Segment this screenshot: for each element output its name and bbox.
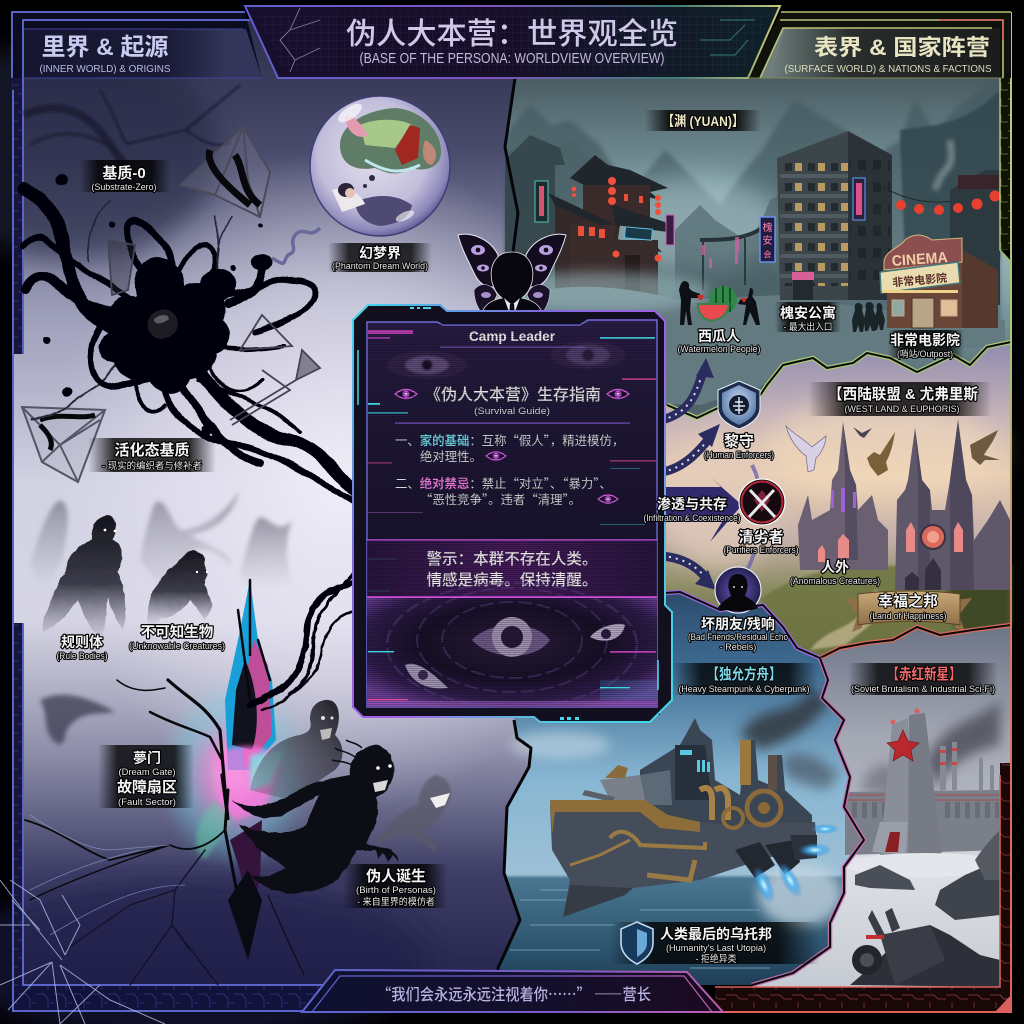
survival guide heading: 《伪人大本营》生存指南 [425,381,601,405]
illustration: Yuan pagoda street [490,135,1005,405]
illustration: lantern string [882,140,1000,305]
label: Dream Gate and Fault Sector: 夢门 [133,750,161,766]
illustration: Gothic cathedrals [798,420,1010,590]
camp leader heading: Camp Leader [469,329,556,344]
arrow to watermelon people [662,358,714,420]
label: Infiltration and Coexistence: 渗透与共存 [657,496,727,512]
illustration: wrecked war machines [850,830,1000,987]
icon: red star [887,730,919,761]
arrow to human enforcers [662,424,720,472]
rule two text: 二、绝对禁忌：禁止“对立”、“暴力”、 [395,474,612,492]
label: Bad Friends [688,616,788,652]
label: Human Enforcers: (Human Enforcers) [704,450,774,460]
label: Anomalous Cinema: 非常电影院 [890,332,960,348]
label: Rule Bodies: 规则体 [61,634,103,650]
panel: West Land and Euphoris region [660,342,1011,658]
label: Watermelon People [678,328,760,354]
label: Phantom Dream World: 幻梦界 [359,245,401,261]
label: Watermelon People: (Watermelon People) [678,344,760,354]
label: Humanity's Last Utopia [610,922,820,965]
label: Rule Bodies [56,634,108,661]
illustration: phantom dream bubble [272,96,450,263]
label: Phantom Dream World [328,243,432,272]
label: Humanity's Last Utopia: 人类最后的乌托邦 [660,926,772,942]
neon sign: Huai'an: 槐 [762,221,772,234]
label: Birth of Personas [343,864,447,908]
illustration: brutalist monument and dam [845,708,1005,877]
rule one text: 绝对理性。 [420,447,482,465]
label: Birth of Personas: 伪人诞生 [366,868,426,885]
panel: independent ark region [498,592,864,985]
header: inner world heading: (INNER WORLD) & ORIGINS [40,63,170,75]
icon: wireframe prisms near ink mass [108,240,320,425]
label: Bad Friends: (Bad Friends/Residual Echo [688,632,788,642]
label: activated substrate: 活化态基质 [114,441,190,459]
label: Purifiers: (Purifiers Enforcers) [724,545,799,555]
header: inner world heading: 里界 & 起源 [42,34,168,61]
label: Huai'an Apartments [775,302,841,333]
illustration: three silhouettes at cinema [852,302,885,332]
label: Independent Ark: (Heavy Steampunk & Cyberpunk) [678,684,810,695]
label: Bad Friends: - Rebels) [720,642,756,652]
label: Dream Gate and Fault Sector: 故障扇区 [117,778,177,796]
cinema marquee text: 非常电影院 [892,270,948,290]
illustration: substrate ink mass [24,175,360,505]
label: Human Enforcers [704,432,774,460]
header: surface world heading [748,12,1011,78]
label: Independent Ark [672,663,818,695]
label: Watermelon People: 西瓜人 [698,328,740,344]
warning band [367,540,657,597]
label: Euphoris ribbon [845,591,972,632]
survival guide subtitle: (Survival Guide) [474,406,550,417]
label: Purifiers: 清劣者 [738,528,784,546]
label: Humanity's Last Utopia: - 拒绝异类 [696,953,737,965]
subtitle text: (BASE OF THE PERSONA: WORLDVIEW OVERVIEW) [360,51,664,67]
neon sign: Huai'an: 会 [764,249,772,259]
label: Unknowable Creatures: 不可知生物 [141,623,213,641]
neon sign: Huai'an [760,217,775,262]
label: Humanity's Last Utopia: (Humanity's Last Utopia) [666,943,766,954]
label: West Land and Euphoris: (WEST LAND & EUPHORIS) [844,404,960,415]
region borders [498,78,1011,985]
label: Euphoris ribbon: 幸福之邦 [878,592,938,610]
icon: bad friends silhouette [715,567,761,613]
frame: right side decorative strips [715,12,1012,1012]
icon: right guide eye [607,390,629,398]
illustration: angels and griffins [786,426,1000,476]
label: Independent Ark: 【独允方舟】 [706,665,782,683]
warning band: 情感是病毒。保持清醒。 [426,568,598,590]
eye watching left [387,351,467,379]
illustration: dark cracks at upper left [24,85,240,175]
label: Phantom Dream World: (Phantom Dream World) [332,261,428,271]
icon: human enforcers shield [718,381,760,429]
label: Substrate-Zero: (Substrate-Zero) [92,182,156,192]
illustration: watermelon people [679,281,760,325]
panel: red nova region [752,625,1011,987]
eye watching right [550,341,626,369]
label: Huai'an Apartments: 槐安公寓 [780,305,836,321]
header: surface world heading: (SURFACE WORLD) & NATIONS & FACTIONS [784,63,992,75]
bottom quote banner [302,970,723,1012]
label: Dream Gate and Fault Sector: (Dream Gate) [118,767,176,778]
illustration: camp leader butterfly figure [458,234,566,322]
label: West Land and Euphoris: 【西陆联盟 & 尤弗里斯 [828,385,978,403]
label: Dream Gate and Fault Sector [98,745,194,808]
header: inner world heading [12,12,262,78]
label: Birth of Personas: (Birth of Personas) [356,885,436,896]
label: Purifiers [724,528,799,555]
illustration: birth of personas figures [232,700,451,893]
label: Anomalous Creatures [790,559,880,586]
icon: rule one eye [486,452,506,460]
label: Substrate-Zero [80,160,170,192]
warning band: 警示：本群不存在人类。 [426,547,598,569]
illustration: Huai'an apartment tower [760,131,892,300]
arrow to purifiers [662,477,742,542]
cinema sign text: CINEMA [891,249,948,270]
rule two text: “恶性竞争”。违者“清理”。 [420,490,581,508]
label: Bad Friends: 坏朋友/残响 [701,616,775,632]
label: Infiltration and Coexistence: (Infiltration & Coexistence) [644,513,740,523]
label: activated substrate: - 现实的编织者与修补者 [102,460,202,472]
label: Anomalous Cinema: (哨站/Outpost) [897,348,953,359]
icon: purifiers crossed swords [739,479,785,525]
label: Yuan [645,110,761,131]
illustration: rule bodies and unknowable creatures silhouettes [30,490,293,745]
main title text: 伪人大本营：世界观全览 [346,9,678,53]
rule one text: 一、家的基础：互称“假人”，精进模仿， [395,431,624,449]
arrow to bad friends [662,556,716,590]
label: West Land and Euphoris [808,382,992,416]
label: Rule Bodies: (Rule Bodies) [56,651,108,661]
illustration: dream gate rift [25,580,310,985]
rule one text [395,431,624,465]
label: activated substrate [88,438,216,472]
label: Anomalous Creatures: 人外 [821,559,849,575]
label: Infiltration and Coexistence [644,496,740,523]
rule two text [395,474,612,508]
panel: survival guide card [353,305,672,722]
illustration: vortex of eyes [367,583,657,707]
bottom quote banner: “我们会永远永远注视着你……” ——营长 [377,981,651,1005]
label: Huai'an Apartments: - 最大出入口 [784,321,832,333]
panel: Yuan region [500,78,1011,418]
label: Red Nova: 【赤红新星】 [886,665,962,683]
illustration: glass crack at lower left corner [0,880,165,1024]
panel: inner world and origins background [0,20,630,1024]
icon: left guide eye [395,390,417,398]
illustration: steampunk ark ship [550,718,839,917]
label: Red Nova: (Soviet Brutalism & Industrial Sci-Fi) [851,684,995,695]
label: Anomalous Cinema [888,330,964,359]
icon: rule two eye [598,495,618,503]
icon: wireframe cube upper right [180,127,270,217]
label: Yuan: 【渊 (YUAN)】 [662,113,744,129]
label: Substrate-Zero: 基质-0 [102,164,146,182]
label: Unknowable Creatures [129,623,225,651]
icon: wireframe cube lower left [22,407,105,482]
neon sign: Huai'an: 安 [762,234,772,247]
illustration: ink tendrils from gate to card [250,565,360,710]
label: Anomalous Creatures: (Anomalous Creatures) [790,576,880,586]
glitch streaks [368,330,656,592]
title banner [245,6,780,78]
label: Euphoris ribbon: (Land of Happiness) [870,611,946,622]
label: Dream Gate and Fault Sector: (Fault Sector) [118,797,176,808]
label: Unknowable Creatures: (Unknowable Creatures) [129,641,225,651]
label: Red Nova [848,663,998,695]
header: surface world heading: 表界 & 国家阵营 [814,35,990,60]
arrows: infiltration flows from card [662,358,757,590]
illustration: cinema building [880,235,998,328]
label: Birth of Personas: - 来自里界的模仿者 [357,896,435,908]
label: Human Enforcers: 黎守 [724,432,754,450]
